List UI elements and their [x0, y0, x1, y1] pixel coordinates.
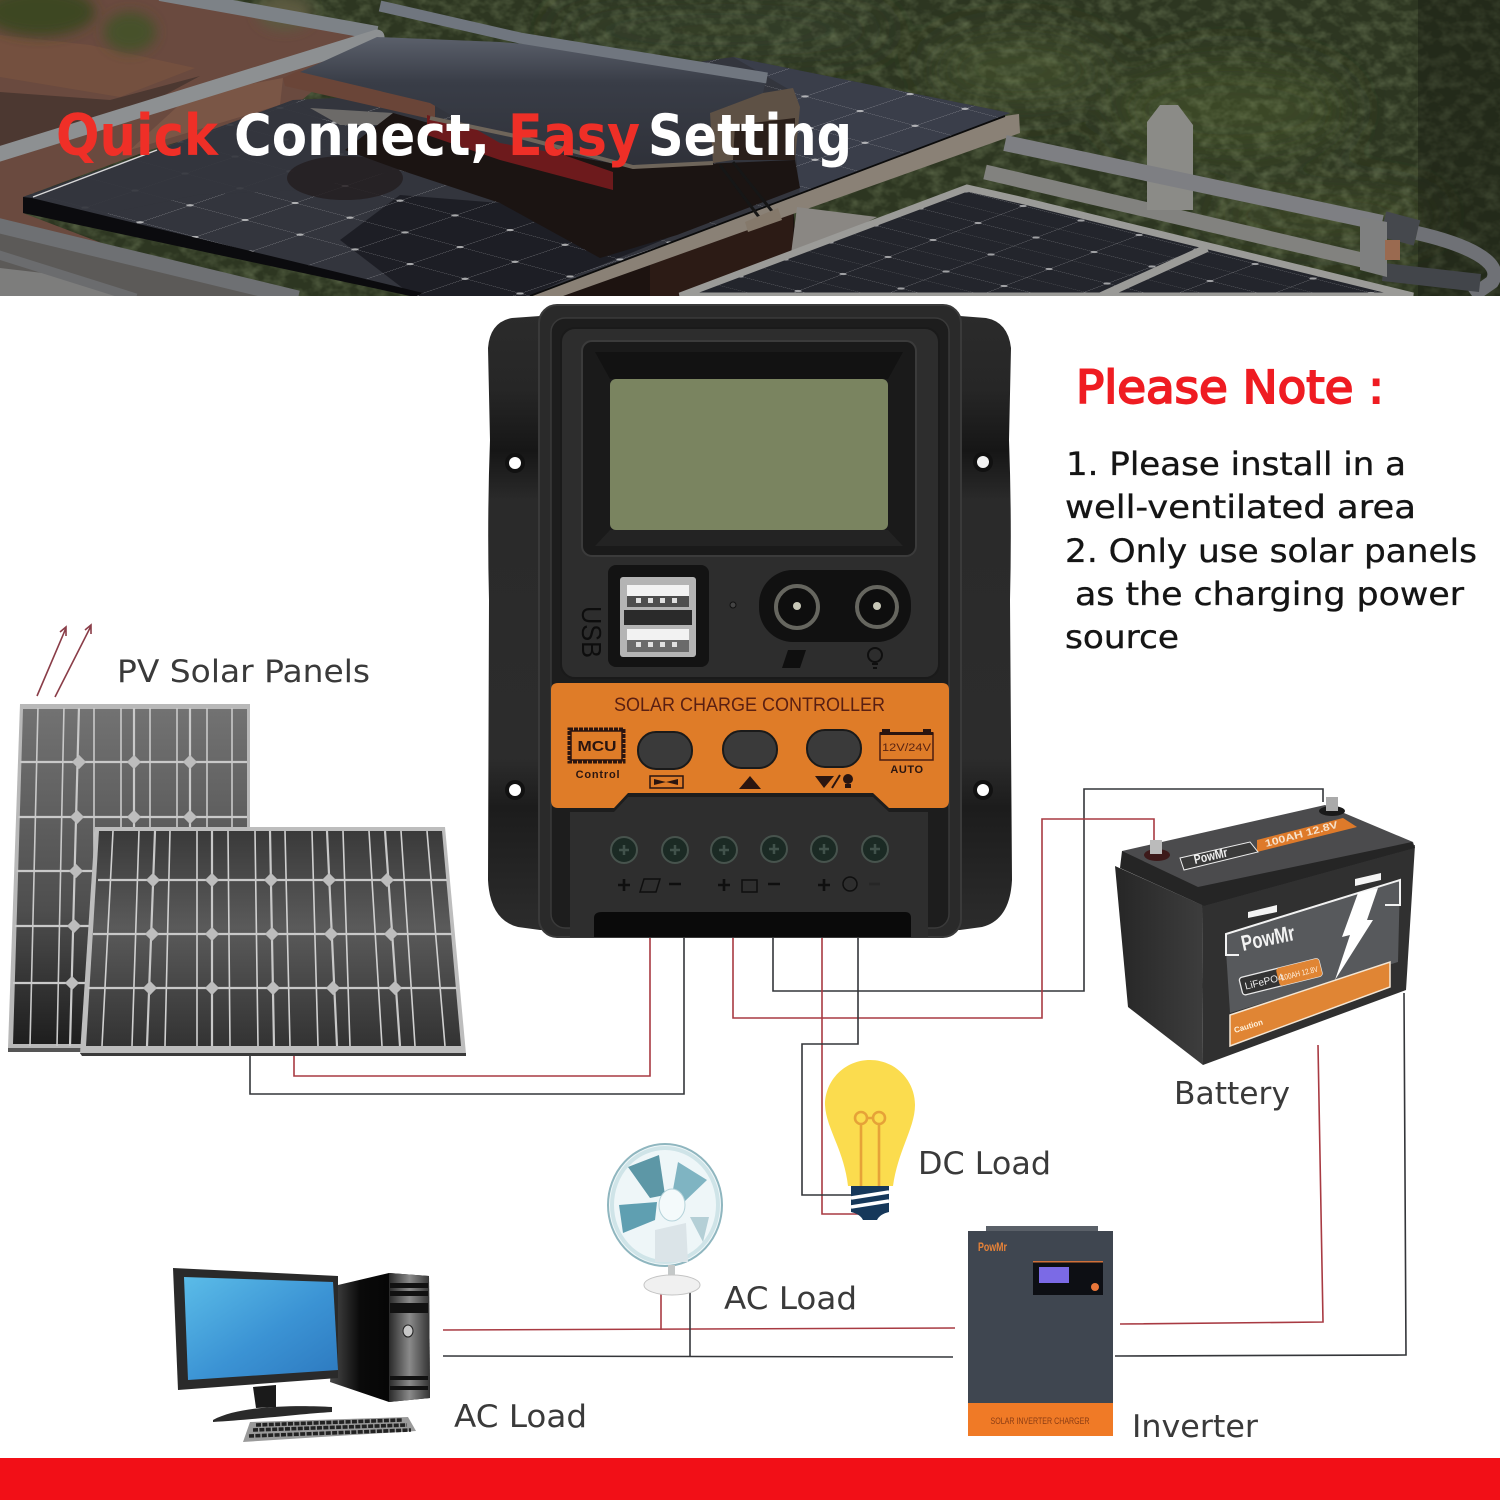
wire: AC neutral: [443, 1356, 953, 1357]
title word: Setting: Setting: [648, 103, 852, 169]
positive terminal: [1144, 840, 1170, 861]
wire: DC load negative: [802, 936, 858, 1195]
red footer bar: [0, 1458, 1500, 1500]
roof surface: [0, 0, 377, 250]
top photo: solar panels on a van roof: [0, 0, 1500, 298]
wire: battery positive: [733, 819, 1154, 1018]
back solar panel: [8, 704, 250, 1052]
wire: inverter positive: [1120, 1045, 1323, 1324]
mounting bracket: [986, 1226, 1098, 1232]
notes panel: [1065, 361, 1477, 656]
rails on the right: [985, 172, 1362, 260]
socket icon: panel: [782, 650, 806, 668]
lid brand: PowMr: [1193, 845, 1229, 867]
AUTO caption: AUTO: [890, 764, 924, 776]
label tabs: [1248, 873, 1381, 918]
wiring diagram: [250, 789, 1406, 1357]
wire: panel negative: [250, 936, 684, 1094]
lid label: [1257, 818, 1357, 852]
label: Battery: Battery: [1174, 1076, 1290, 1112]
LiFePO4 badge: [1239, 958, 1323, 995]
note heading: Please Note :: [1076, 361, 1384, 414]
strap cables: [732, 161, 773, 217]
battery voltage icon: 12V/24V: [882, 742, 932, 754]
button: mode: [638, 732, 692, 769]
title: [56, 103, 852, 169]
front label background: [1225, 880, 1400, 1013]
icon: DC light bulb: [825, 1060, 915, 1220]
caution band: [1230, 962, 1390, 1046]
battery voltage icon: [880, 729, 933, 760]
LiFePO4 badge: LiFePO4: [1244, 972, 1285, 993]
socket icon: bulb: [868, 648, 882, 668]
bottom cable slot: [594, 912, 911, 937]
note line 1: 1. Please install in a: [1066, 445, 1406, 483]
note line 5: source: [1065, 618, 1179, 656]
wire: fan neutral: [689, 1293, 691, 1356]
orange base: [968, 1403, 1113, 1436]
MCU chip icon: [569, 729, 624, 762]
brand: PowMr: [978, 1240, 1007, 1254]
title word: Easy: Easy: [508, 103, 640, 169]
box lid: [300, 37, 767, 167]
battery: [1115, 797, 1415, 1065]
mounting hole right: [973, 452, 993, 472]
inverter case: [968, 1231, 1113, 1403]
battery left side: [1115, 866, 1203, 1065]
MCU chip icon: MCU: [578, 738, 616, 755]
label: AC Load computer: AC Load: [454, 1399, 587, 1435]
mounting hole left: [505, 453, 525, 473]
USB label: USB: [576, 606, 607, 658]
arrows: sunlight: [37, 625, 91, 697]
controller mounting flanges: [488, 316, 1012, 930]
LCD bezel: [582, 341, 916, 556]
note line 3: 2. Only use solar panels: [1065, 532, 1477, 570]
wire: battery negative: [773, 789, 1323, 991]
controller body: [539, 305, 961, 937]
main solar panel surface: [23, 57, 1010, 296]
wire: DC load positive: [822, 936, 862, 1214]
lower-left ground: [0, 234, 300, 296]
lid capacity: 100AH 12.8V: [1264, 820, 1340, 850]
concrete patch: [792, 207, 877, 250]
front label outline: [1226, 880, 1400, 955]
label: DC Load: DC Load: [918, 1146, 1051, 1182]
MCU caption: Control: [576, 769, 620, 781]
caution text: Caution: [1233, 1018, 1264, 1035]
solar charge controller: [488, 305, 1012, 937]
battery lid: [1122, 805, 1415, 906]
base text: SOLAR INVERTER CHARGER: [990, 1416, 1090, 1427]
strap cap: [710, 88, 800, 163]
title word: Connect,: Connect,: [234, 103, 490, 169]
box ledge: [312, 78, 435, 118]
monitor: [173, 1268, 338, 1390]
mounting hole lower left: [505, 780, 525, 800]
display unit: [1033, 1261, 1103, 1295]
label: AC Load fan: AC Load: [724, 1281, 857, 1317]
terminal block: [570, 797, 928, 937]
battery front face: [1202, 845, 1415, 1065]
note line 4: as the charging power: [1075, 575, 1465, 613]
button: down: [807, 730, 861, 767]
lower-left rails: [0, 225, 298, 298]
note line 2: well-ventilated area: [1065, 488, 1416, 526]
inverter: [968, 1226, 1113, 1436]
wire: inverter negative: [1115, 993, 1406, 1356]
icon: up arrow: [739, 776, 761, 789]
brand on battery front: PowMr: [1239, 921, 1297, 957]
negative terminal: [1319, 797, 1345, 816]
wire: fan line: [660, 1293, 662, 1330]
label: Inverter: Inverter: [1132, 1409, 1258, 1445]
mounting hole lower right: [973, 780, 993, 800]
orange control panel: [551, 683, 949, 808]
DC output sockets: [759, 570, 911, 642]
label: PV Solar Panels: PV Solar Panels: [117, 654, 370, 690]
terminal symbols: [618, 877, 880, 892]
status LED: [730, 602, 736, 608]
wire: panel positive: [294, 936, 650, 1076]
icon: electric fan: [608, 1144, 722, 1295]
icon: mode: [650, 776, 683, 788]
keyboard: [243, 1417, 416, 1442]
LCD screen: [610, 379, 888, 530]
wire: AC line: [443, 1328, 955, 1330]
icon: down arrow and light: [815, 774, 853, 788]
rack rails upper left: [0, 0, 377, 155]
icon: desktop computer: [173, 1268, 430, 1442]
title word: Quick: Quick: [56, 103, 219, 169]
terminal screws: [611, 836, 888, 863]
product name: SOLAR CHARGE CONTROLLER: [614, 695, 885, 716]
panel frame: [530, 114, 1020, 296]
USB ports: [608, 565, 709, 667]
front solar panel: [80, 827, 466, 1056]
button: up: [723, 731, 777, 768]
panel black edge: [23, 197, 423, 297]
box lower body: [345, 113, 800, 258]
computer tower: [330, 1273, 430, 1402]
LiFePO4 badge: 100AH 12.8V: [1280, 965, 1320, 983]
second solar panel: [700, 192, 1382, 292]
box red stripes: [427, 115, 613, 190]
lightning bolt: [1335, 888, 1378, 980]
